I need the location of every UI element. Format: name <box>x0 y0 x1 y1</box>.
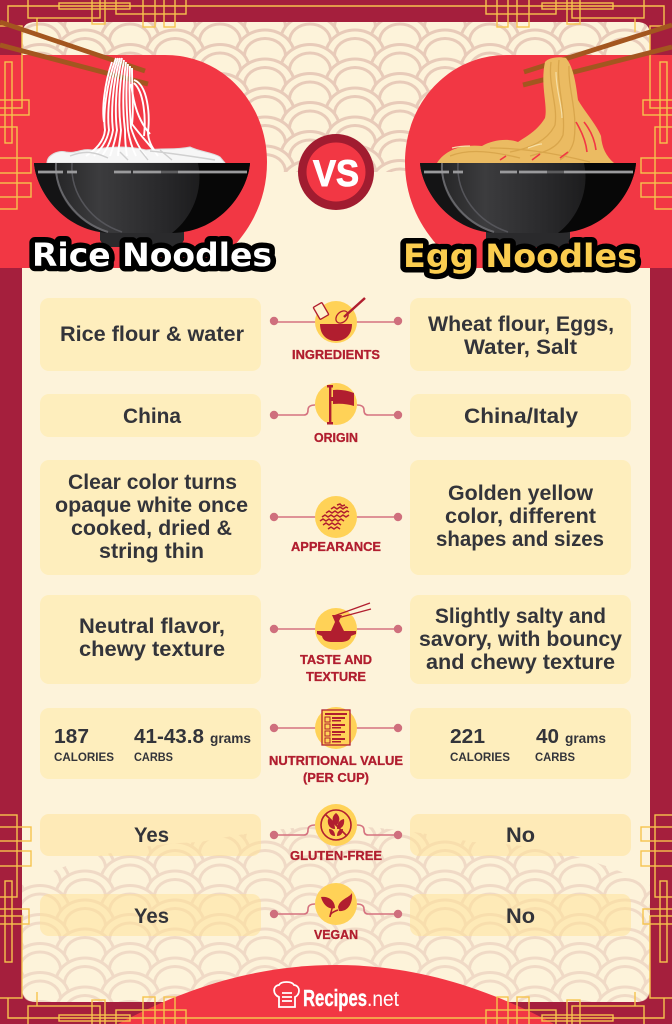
card: rice nutrition: CALORIES <box>54 750 114 764</box>
icon: noodle bowl with chopsticks <box>315 603 371 650</box>
card: rice appearance: Clear color turns <box>68 471 237 494</box>
connector <box>274 727 398 729</box>
right red header shape <box>405 55 672 268</box>
label: ORIGIN <box>314 431 358 445</box>
label: (PER CUP) <box>303 771 369 785</box>
card: rice taste <box>40 595 261 684</box>
top scale pattern <box>22 22 650 172</box>
label: TEXTURE <box>306 670 366 684</box>
card: rice nutrition: CARBS <box>134 750 173 764</box>
card: rice taste: chewy texture <box>79 638 225 661</box>
icon: flag <box>315 383 357 425</box>
row: ingredients <box>40 298 631 371</box>
connector <box>274 904 398 914</box>
card: egg appearance: Golden yellow <box>448 482 594 505</box>
card: egg taste: and chewy texture <box>426 651 615 674</box>
card: rice nutrition: grams <box>210 730 251 746</box>
label: NUTRITIONAL VALUE <box>269 754 403 768</box>
label: TASTE AND <box>300 653 372 667</box>
title: Egg Noodles: Egg Noodles <box>403 237 637 275</box>
icon: leaves <box>315 883 357 925</box>
card: rice appearance <box>40 460 261 575</box>
card: rice appearance: cooked, dried & <box>71 517 232 540</box>
card: egg gluten-free <box>410 814 631 856</box>
card: egg appearance: shapes and sizes <box>436 528 604 551</box>
card: rice gluten-free: Yes <box>134 824 169 847</box>
connector <box>274 321 398 323</box>
bottom scale pattern <box>22 826 650 1002</box>
card: egg nutrition: 40 <box>536 726 559 748</box>
card: egg nutrition: CALORIES <box>450 750 510 764</box>
card: rice gluten-free <box>40 814 261 856</box>
card: rice vegan <box>40 894 261 936</box>
label: INGREDIENTS <box>292 348 380 362</box>
icon: bowl, shaker and whisk <box>313 298 365 343</box>
right bowl <box>420 163 636 247</box>
row: gluten-free <box>40 804 631 863</box>
card: rice origin: China <box>123 405 181 428</box>
icon: chef hat <box>274 982 299 1007</box>
card: egg origin: China/Italy <box>464 405 578 428</box>
label <box>300 653 372 684</box>
logo: Recipes.net: .net <box>367 988 399 1011</box>
card: egg ingredients: Water, Salt <box>464 336 577 359</box>
row: appearance <box>40 460 631 575</box>
label: APPEARANCE <box>291 540 381 554</box>
card: rice ingredients <box>40 298 261 371</box>
card: rice origin <box>40 394 261 437</box>
card: rice vegan: Yes <box>134 905 169 928</box>
footer red dome <box>118 965 554 1024</box>
connector <box>274 405 398 415</box>
card: egg nutrition: 221 <box>450 726 485 748</box>
card: egg vegan <box>410 894 631 936</box>
card: egg appearance <box>410 460 631 575</box>
label: GLUTEN-FREE <box>290 849 382 863</box>
card: egg nutrition <box>410 708 631 779</box>
logo: Recipes.net: Recipes <box>303 985 367 1011</box>
left chopsticks <box>0 22 148 84</box>
card: egg origin <box>410 394 631 437</box>
card: egg taste: savory, with bouncy <box>419 628 622 651</box>
card: rice nutrition: 187 <box>54 726 89 748</box>
card: egg ingredients <box>410 298 631 371</box>
row: origin <box>40 383 631 445</box>
VS badge <box>298 134 374 210</box>
connector <box>274 628 398 630</box>
connector <box>274 825 398 835</box>
row: vegan <box>40 883 631 942</box>
card: egg vegan: No <box>506 905 535 928</box>
icon: no gluten <box>315 804 357 846</box>
card: rice ingredients: Rice flour & water <box>60 323 244 346</box>
label: VEGAN <box>314 928 358 942</box>
left bowl <box>34 163 250 247</box>
right chopsticks <box>523 25 672 85</box>
left noodles <box>47 58 225 163</box>
VS badge: VS <box>313 153 359 194</box>
card: egg nutrition: grams <box>565 730 606 746</box>
label <box>269 754 403 785</box>
left red header shape <box>0 55 267 268</box>
title: Rice Noodles: Rice Noodles <box>32 236 272 274</box>
cream area under VS <box>268 172 404 292</box>
logo: Recipes.net <box>274 982 399 1011</box>
icon: checklist <box>315 707 357 749</box>
card: rice nutrition <box>40 708 261 779</box>
card: rice nutrition: 41-43.8 <box>134 726 204 748</box>
card: rice appearance: string thin <box>99 540 204 563</box>
card: rice taste: Neutral flavor, <box>79 615 225 638</box>
connector <box>274 516 398 518</box>
card: egg appearance: color, different <box>445 505 596 528</box>
row: taste and texture <box>40 595 631 684</box>
card: rice appearance: opaque white once <box>55 494 248 517</box>
card: egg nutrition: CARBS <box>535 750 575 764</box>
card: egg gluten-free: No <box>506 824 535 847</box>
card: egg taste <box>410 595 631 684</box>
card: egg taste: Slightly salty and <box>435 605 606 628</box>
card: egg ingredients: Wheat flour, Eggs, <box>428 313 614 336</box>
right noodles <box>437 57 614 163</box>
row: nutritional value <box>40 707 631 785</box>
icon: wavy noodles <box>315 496 357 538</box>
